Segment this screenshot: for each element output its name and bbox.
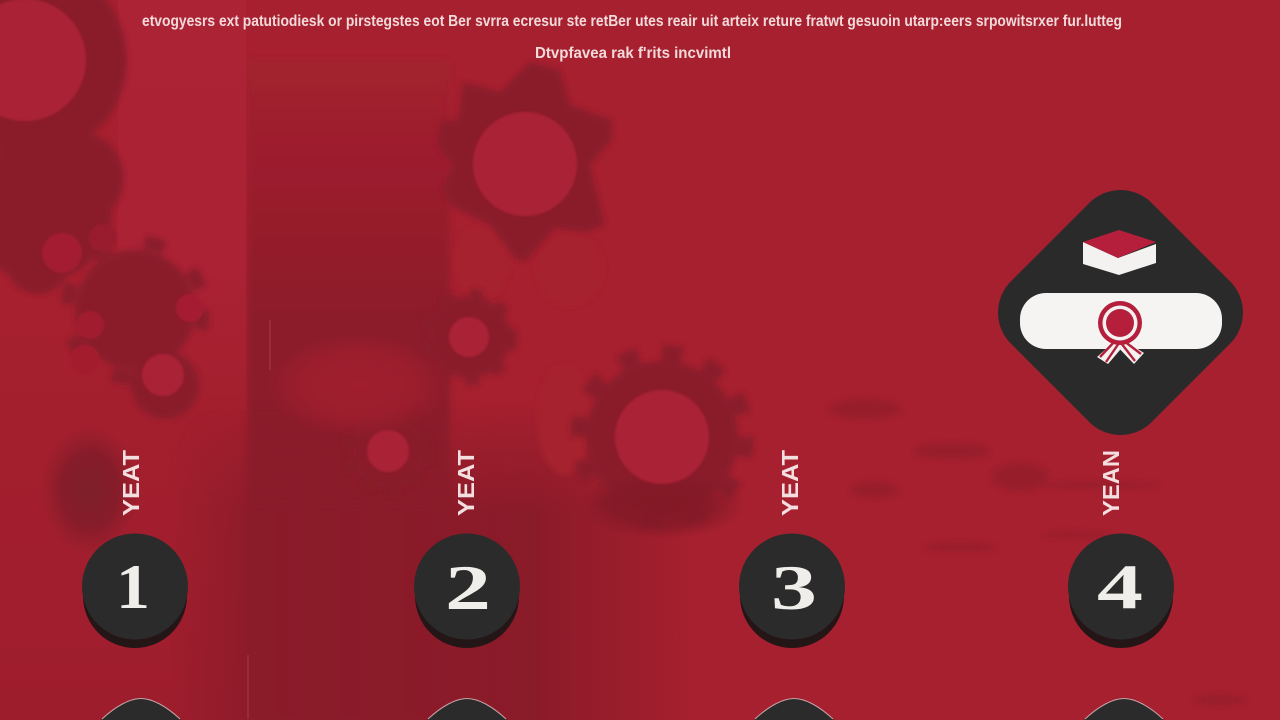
badge diamond [980, 172, 1261, 453]
icon: diploma scroll [1020, 293, 1222, 349]
background gears [0, 0, 746, 556]
year 4 marker [1068, 450, 1174, 648]
year 2 marker [414, 450, 520, 648]
year 2 label: YEAT [453, 450, 479, 516]
year 4 badge [1068, 534, 1174, 648]
bottom badge 4 [1084, 698, 1164, 720]
year 1 marker [82, 450, 188, 648]
year 2 badge [414, 534, 520, 648]
icon: graduation cap [1083, 230, 1156, 275]
year 4 number: 4 [1097, 551, 1143, 622]
year 4 label: YEAN [1098, 450, 1124, 516]
background [170, 138, 648, 720]
bottom badge 2 [427, 698, 507, 720]
faint vertical scratches [248, 320, 270, 719]
bottom badge 1 [101, 698, 181, 720]
year 1 number: 1 [116, 551, 150, 622]
diploma badge [980, 172, 1261, 453]
year 1 badge [82, 534, 188, 648]
year 3 badge [739, 534, 845, 648]
intro text [142, 13, 1122, 62]
intro line 1: etvogyesrs ext patutiodiesk or pirstegstes eot Ber svrra ecresur ste retBer utes reair uit arteix reture fratwt gesuoin utarp:eers srpowitsrxer fur.lutteg [142, 13, 1122, 30]
intro line 2: Dtvpfavea rak f'rits incvimtl [535, 45, 731, 62]
year 1 label: YEAT [118, 450, 144, 516]
icon: ribbon seal [1097, 301, 1144, 364]
background smudges [829, 399, 1246, 705]
year 3 marker [739, 450, 845, 648]
year 2 number: 2 [445, 552, 491, 623]
bottom badge 3 [754, 698, 834, 720]
year 3 number: 3 [771, 552, 817, 623]
year 3 label: YEAT [777, 450, 803, 516]
